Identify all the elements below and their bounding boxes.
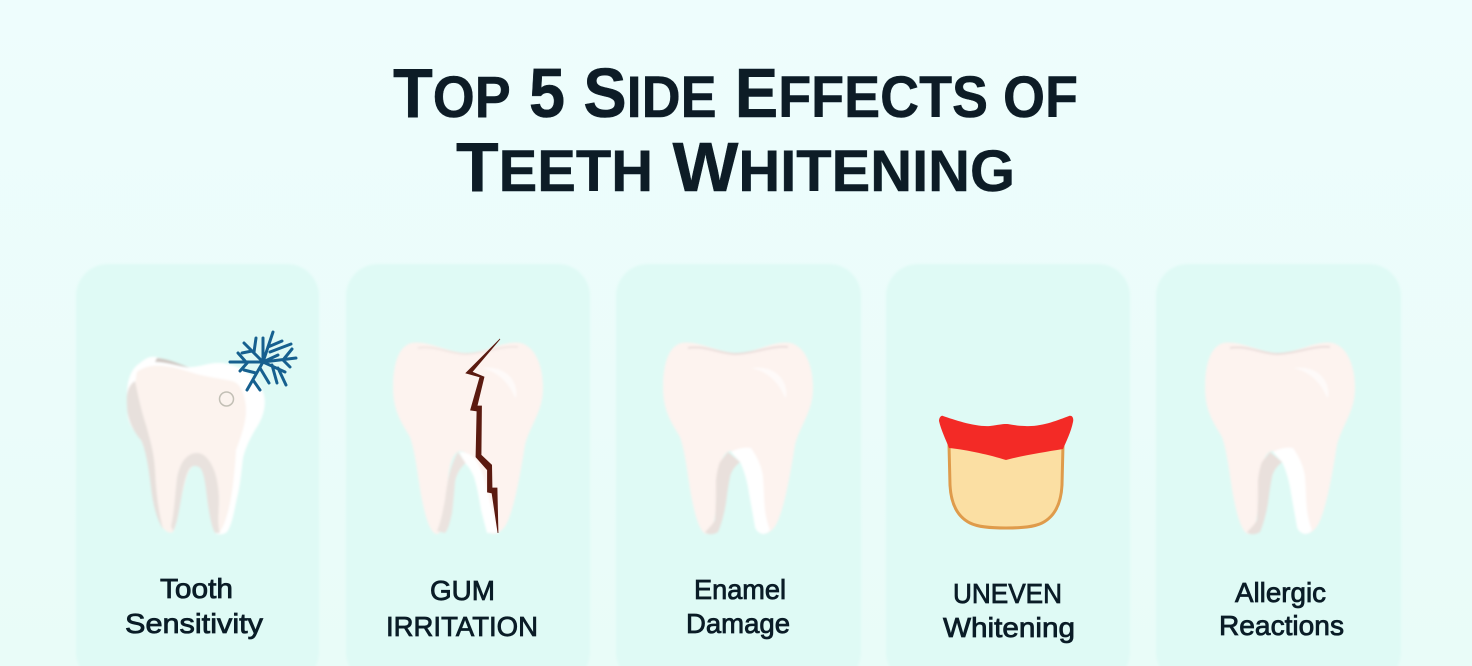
title: TOP 5 SIDE EFFECTS OF (393, 54, 1078, 132)
panel: enamel damage (616, 264, 861, 666)
title: TEETH WHITENING (456, 128, 1015, 206)
icon: red gum band (939, 416, 1073, 460)
icon: tooth (663, 343, 813, 534)
label (1219, 577, 1344, 641)
label: UNEVEN (953, 578, 1062, 609)
label (686, 574, 790, 639)
icon: tooth (1205, 343, 1355, 534)
icon: sensitivity spot (220, 392, 234, 406)
icon: uneven tooth (939, 416, 1073, 528)
label: GUM (430, 575, 495, 606)
label: Whitening (943, 612, 1075, 643)
icon: crack (466, 339, 500, 533)
label (125, 573, 263, 639)
label: Reactions (1219, 610, 1344, 641)
label: Allergic (1235, 577, 1326, 608)
label (386, 575, 538, 642)
label: Enamel (694, 574, 786, 605)
label: Tooth (160, 573, 233, 604)
panel: allergic reactions (1156, 264, 1401, 666)
label: Damage (686, 608, 790, 639)
icon: cracked tooth (393, 339, 543, 534)
label (943, 578, 1075, 643)
panel: gum irritation (346, 264, 590, 666)
icon: snowflake (230, 332, 296, 390)
panel: uneven whitening (886, 264, 1130, 666)
label: Sensitivity (125, 608, 263, 639)
icon: sensitive tooth with snowflake (127, 332, 296, 534)
label: IRRITATION (386, 611, 538, 642)
title (393, 54, 1078, 206)
panel: tooth sensitivity (76, 264, 319, 666)
